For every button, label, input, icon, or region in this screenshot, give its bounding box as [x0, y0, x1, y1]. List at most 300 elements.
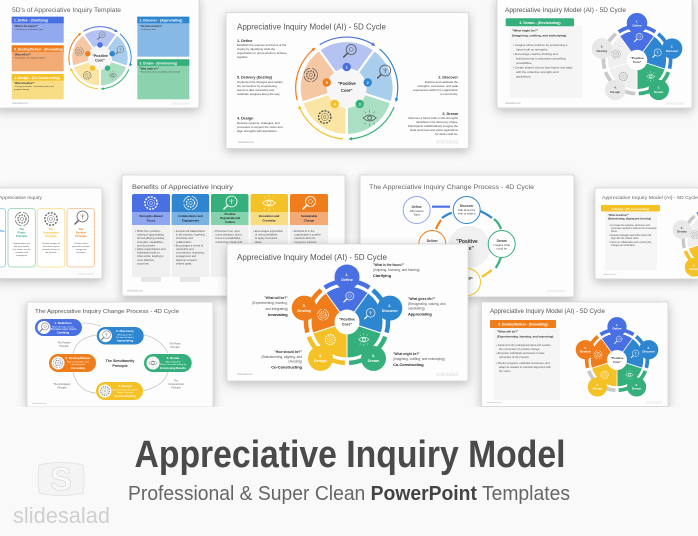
logo: slidesalad: S	[50, 461, 72, 497]
core circle: "Positive	[456, 239, 478, 245]
text: design question and bullets: (Brainstorming, aligning and choosing)	[608, 218, 651, 220]
panel: define	[12, 17, 64, 43]
wheel: full colour 5D cycle: Design	[314, 359, 328, 363]
bullet list: • Imagine what could be by envisioning a	[513, 43, 568, 47]
panel: deliver: 5. Destiny/Deliver - (Innovating)	[14, 47, 63, 51]
slide heading: Appreciative Inquiry Model (AI) - 5D Cycle	[237, 22, 387, 32]
text: dream: ideal outcomes and vision aspirations	[410, 128, 459, 132]
card: anticipatory principle: the present.	[45, 251, 57, 254]
wheel: full colour 5D cycle: "Positive	[339, 318, 355, 322]
bullet list: adapt as needed to maintain alignment with	[499, 365, 551, 369]
principle labels: The Positive	[57, 342, 71, 344]
wheel: design highlighted: Destiny	[677, 230, 687, 234]
callout: clarifying: "What is the focus?"	[373, 263, 405, 267]
column: strength-based focus: Focus	[147, 218, 156, 222]
wheel: dream highlighted: Destiny	[597, 49, 608, 53]
card: positive principle: Positive affect	[74, 242, 88, 245]
principle labels: The Poetic	[169, 342, 182, 346]
card: anticipatory principle: Anticipatory	[43, 230, 59, 234]
slide footer: slidesalad	[78, 272, 94, 276]
callout: co-constructing, left: Co-Constructing	[271, 364, 303, 370]
banner: design: 4. Design - (Co-Constructing)	[611, 207, 649, 211]
wheel: positive core: "Positive	[92, 54, 108, 58]
card: positive principle: generates positive	[72, 245, 91, 248]
slide footer	[238, 140, 458, 146]
text: dream: identified in the discovery phase.	[416, 120, 458, 124]
text: define: together.	[237, 55, 248, 59]
text: destiny question: (Experimenting, learning, and improving)	[497, 334, 553, 338]
node: design: Design	[462, 276, 472, 280]
card: positive principle: Principle	[75, 234, 87, 238]
wheel: full colour 5D cycle: Discover	[382, 309, 398, 313]
wheel: destiny highlighted: 1.	[616, 323, 618, 327]
card: anticipatory principle: Positive images of	[42, 242, 60, 245]
text: dream: 3. Dream	[442, 112, 459, 116]
slide footer: slidesalad.com	[127, 290, 143, 292]
wheel: positive core: 4	[334, 102, 336, 106]
wheel: destiny highlighted: Define	[612, 327, 622, 331]
pill: discovery: What gives life?	[117, 334, 133, 336]
panel: design: "What should be?"	[14, 82, 35, 85]
slide footer: slidesalad.com	[238, 141, 254, 144]
wheel: positive core: Core"	[95, 58, 105, 62]
slide footer	[12, 100, 189, 106]
text: design question and bullets: future.	[611, 230, 618, 233]
text: design question and bullets: "What should be?"	[608, 214, 629, 217]
callout: co-constructing, right: Co-Constructing	[393, 362, 424, 367]
wheel: full colour 5D cycle: Dream	[368, 359, 380, 363]
card: positive principle: The	[79, 227, 84, 231]
wheel: destiny highlighted: 3.	[635, 383, 638, 387]
column: positive organizational culture: Positive	[224, 212, 236, 216]
pill: design	[96, 382, 143, 400]
text: delivery: celebrate progress along the way.	[237, 92, 280, 96]
wheel: positive core: Core"	[341, 88, 352, 93]
slide footer: slidesalad.com	[12, 102, 28, 105]
text: design question and bullets: • Develop strategies and action plans that	[609, 234, 652, 237]
logo: slidesalad: slidesalad	[13, 503, 110, 528]
center label: The Simultaneity	[106, 359, 134, 363]
wheel: design highlighted: 4.	[693, 263, 695, 267]
text panel background	[605, 212, 657, 270]
column: positive organizational culture: Culture	[225, 220, 235, 224]
principle labels: Principle	[171, 386, 181, 390]
column: innovation and creativity: of new possibilities	[255, 233, 278, 237]
callout: appreciating: (Recognizing, valuing, and	[408, 302, 446, 306]
column: strength-based focus: strengths, capabilities,	[137, 240, 164, 244]
banner: destiny	[490, 320, 556, 328]
wheel: dream highlighted: Dream	[654, 90, 664, 94]
text: define: organization or group wants to achieve	[237, 51, 287, 55]
callout: innovating: "What will be?"	[264, 296, 288, 300]
slide: dream stage, top right	[497, 0, 692, 108]
principle labels: Principle	[170, 346, 180, 349]
column: sustainable change: organization's positive	[294, 233, 321, 237]
slide: design stage, right edge	[595, 188, 698, 279]
slide footer: slidesalad	[436, 372, 458, 378]
pill: design: What should be the ideal?	[112, 388, 138, 392]
card: poetic principle: The	[19, 227, 24, 231]
wheel: positive core: 1	[346, 65, 348, 69]
text: destiny question: "What will be?"	[497, 330, 519, 334]
wheel: destiny highlighted: 5.	[584, 346, 587, 350]
slide footer: slidesalad	[645, 400, 662, 404]
bullet list: brainstorming to articulate compelling	[516, 56, 566, 60]
principle labels: The Anticipatory	[53, 383, 71, 386]
column: positive organizational culture: Organizational	[220, 216, 240, 220]
pill: definition: Clarifying	[57, 330, 70, 334]
column: strength-based focus: • Helps organizations and	[135, 247, 166, 251]
wheel: dream highlighted	[592, 13, 682, 100]
wheel: positive core: 5	[326, 81, 328, 85]
wheel: dream highlighted: Define	[633, 23, 642, 27]
node: deliver	[419, 230, 446, 258]
slide heading: The Appreciative Inquiry Change Process - 4D Cycle	[35, 309, 179, 315]
panel: design: • Design principles - Innovative plans and	[14, 85, 55, 88]
text: dream question: "What might be?"	[512, 28, 539, 32]
text: design: 4. Design	[237, 116, 254, 120]
panel: discover: 2. Discover - (Appreciating)	[140, 19, 182, 23]
pill: design: Co-Constructing	[114, 394, 136, 398]
column: strength-based focus: outcomes.	[137, 261, 150, 265]
callout: appreciating: celebrating)	[408, 306, 425, 310]
card: poetic principle: Principle	[16, 234, 28, 238]
bullet list: • Encourage creative thinking and	[513, 52, 558, 56]
text panel background	[494, 328, 560, 400]
column: positive organizational culture: • Promotes trust, open	[214, 229, 241, 233]
text: design: align strengths with aspirations.	[237, 129, 278, 133]
wheel: design highlighted: 5.	[681, 226, 683, 230]
panel: dream	[137, 59, 189, 99]
bullet list: • Monitor progress, celebrate successes, and	[496, 361, 550, 365]
slide heading: Appreciative Inquiry Model (AI) - 5D Cycle	[602, 195, 698, 200]
slide footer	[487, 400, 662, 404]
node: dream: could be	[496, 246, 507, 250]
column: innovation and creativity: Innovation and	[259, 214, 280, 218]
card: anticipatory principle: Principle	[45, 234, 57, 238]
column: sustainable change	[290, 194, 328, 277]
node: define	[403, 196, 430, 224]
panel: define: • Clarifying an intentional topic	[14, 28, 44, 31]
wheel: dream highlighted: Core"	[633, 60, 642, 64]
text: define: 1. Define	[237, 39, 252, 43]
wheel: full colour 5D cycle	[292, 264, 402, 371]
bullet list: ownership of the process.	[499, 355, 530, 359]
column: collaboration and engagement: collaboration.	[176, 240, 192, 244]
pill: dream: Envisioning Results	[160, 366, 186, 370]
wheel: full colour 5D cycle: 1.	[345, 273, 349, 277]
slide: 4D cycle change process	[360, 175, 574, 297]
column: sustainable change: Sustainable	[301, 214, 317, 218]
pill: destiny/deliver: and improvise	[71, 363, 86, 366]
wheel: full colour 5D cycle: 2.	[388, 304, 391, 308]
wheel: design highlighted	[673, 209, 698, 277]
column: strength-based focus: • Shifts from problem-	[135, 229, 161, 233]
pill: definition: affirmative topic choice	[49, 327, 77, 331]
pill: dream: What might be?	[165, 360, 181, 364]
bullet list: • Empower individuals and teams to take	[496, 351, 545, 355]
column: sustainable change: long-term success.	[294, 240, 317, 244]
text: delivery: Implement the changes and sustain	[237, 80, 283, 84]
callout: innovating: Innovating	[268, 312, 288, 317]
text: design: Develop systems, strategies, and	[237, 121, 280, 125]
wheel: positive core: "Positive	[338, 81, 356, 86]
text: define: Establish the purpose and focus of the	[237, 43, 287, 47]
text: dream: Discover a future built on the strengths	[408, 116, 459, 120]
text: discover: strengths, successes, and peak	[418, 84, 459, 88]
column: strength-based focus: and successes.	[137, 243, 156, 247]
slide: destiny stage, bottom right	[482, 302, 668, 406]
wheel: dream highlighted: Discover	[666, 49, 679, 53]
logo: slidesalad	[13, 461, 110, 528]
main title: Appreciative Inquiry Model	[134, 434, 566, 476]
center label: Principle	[112, 364, 128, 368]
bullet list: with the collective strengths and	[516, 70, 559, 74]
callout: co-constructing, right: "What might be?"	[393, 352, 420, 356]
wheel: dream highlighted: Design	[610, 90, 620, 94]
card: positive principle: energy and	[76, 248, 87, 251]
principle labels: Constructionist	[168, 383, 184, 386]
slide footer: slidesalad.com	[237, 373, 253, 376]
wheel: full colour 5D cycle: Destiny	[297, 309, 312, 313]
card: anticipatory principle: the future inspire	[43, 245, 60, 248]
column: positive organizational culture: focus on possibilities,	[216, 236, 241, 240]
callout: innovating: (Experimenting, learning,	[252, 301, 288, 305]
column: innovation and creativity: • Encourages exploration	[253, 229, 283, 233]
bullet list: possibilities.	[516, 61, 532, 65]
wheel: destiny highlighted: Destiny	[580, 350, 591, 354]
slide: 4D process with principles, bottom left	[27, 302, 213, 407]
wheel: destiny highlighted: Dream	[632, 387, 642, 391]
bullet list: the vision.	[499, 369, 511, 373]
column: positive organizational culture	[211, 194, 248, 277]
text: discover: or community.	[440, 92, 458, 96]
pill: design: 4. Design	[118, 384, 132, 388]
column: positive organizational culture: communication, and a	[216, 233, 242, 237]
card: poetic principle: like open books	[14, 246, 30, 248]
slide heading: Benefits of Appreciative Inquiry	[132, 184, 234, 191]
wheel: positive core: 2	[367, 81, 369, 85]
node: discover: best of what is	[458, 212, 476, 216]
card: anticipatory principle: positive actions in	[42, 248, 60, 251]
column: collaboration and engagement: Collaboration and	[178, 214, 203, 218]
wheel: destiny highlighted: Design	[592, 387, 603, 391]
text: define: inquiry by identifying what the	[237, 47, 275, 51]
wheel: dream highlighted: 3.	[658, 86, 660, 90]
node: dream: Imagine what	[493, 243, 510, 247]
column: collaboration and engagement: in the process, fostering	[176, 233, 205, 237]
core circle	[448, 226, 490, 268]
column: sustainable change: • Embeds AI in the	[292, 229, 315, 233]
column: strength-based focus: solving to appreciating	[137, 233, 164, 237]
slide heading: The Appreciative Inquiry Change Process - 4D Cycle	[369, 184, 534, 191]
panel: deliver	[12, 45, 64, 71]
column: innovation and creativity	[250, 194, 288, 277]
text: design question and bullets: align with the shared vision.	[611, 237, 640, 240]
column: collaboration and engagement: Engagement	[182, 218, 199, 222]
card: positive principle: outcomes.	[76, 251, 86, 254]
pill: definition: 1. Definition	[54, 321, 72, 325]
wheel: full colour 5D cycle: Core"	[342, 322, 352, 326]
bullet list: aspirations.	[516, 74, 532, 78]
text: delivery: 5. Delivery (Destiny)	[237, 76, 273, 80]
column: collaboration and engagement: alignment toward	[176, 258, 197, 262]
wheel: destiny highlighted: 4.	[596, 383, 599, 387]
column: strength-based focus: what works, leading to	[137, 254, 164, 258]
node: discover: Talk about the	[458, 208, 476, 212]
text: design question and bullets: • Co-create the systems, structures, and	[609, 224, 651, 227]
banner: destiny: 5. Destiny/Deliver - (Innovating)	[498, 322, 548, 326]
panel: design: program design	[14, 88, 30, 91]
card: poetic principle: Poetic	[18, 230, 26, 234]
text: discover: Explore and celebrate the	[425, 80, 458, 84]
column: collaboration and engagement: shared goals.	[176, 261, 192, 265]
text: delivery: teams to take ownership and	[237, 88, 274, 92]
column: collaboration and engagement: • Encourages a sense of	[174, 243, 203, 247]
node: design	[454, 268, 480, 296]
panel: design: 4. Design - (Co-Constructing)	[14, 76, 60, 80]
callout: clarifying: Clarifying	[373, 273, 392, 278]
column: strength-based focus	[132, 194, 170, 282]
column: sustainable change: Change	[304, 218, 315, 222]
slide footer: slidesalad	[436, 140, 458, 146]
text panel background	[510, 26, 582, 98]
card: poetic principle: rewritten and	[15, 251, 29, 254]
slide footer: slidesalad	[547, 288, 565, 293]
wheel: destiny highlighted: "Positive	[611, 356, 624, 360]
slide footer	[237, 372, 458, 378]
callout: co-constructing, left: "How should be?"	[274, 350, 302, 354]
panel: discover: "The best of what is"	[140, 25, 162, 28]
pill: definition: What is the topic of focus	[52, 326, 74, 328]
pill: dream	[144, 354, 192, 372]
callout: co-constructing, left: (Brainstorming, aligning, and	[261, 355, 302, 359]
slide footer: slidesalad.com	[487, 402, 502, 404]
pill: definition	[35, 319, 82, 336]
text: dream: for what could be.	[435, 132, 458, 136]
wheel: dream highlighted: "Positive	[630, 56, 644, 60]
panel: define: "What is the inquiry?"	[14, 25, 38, 28]
card: poetic principle: Organizations are	[13, 242, 31, 245]
card: poetic principle: that stories can be	[13, 248, 31, 251]
column: collaboration and engagement: • Involves all stakeholders	[174, 229, 206, 233]
column: collaboration and engagement: inclusivity and	[176, 236, 193, 240]
slide heading: Appreciative Inquiry	[0, 195, 43, 201]
node: dream: Dream	[497, 239, 507, 243]
wheel: destiny highlighted: Core"	[613, 360, 622, 364]
subtitle: Professional & Super Clean PowerPoint Templates	[128, 483, 570, 505]
pill: discovery: The best of what is	[116, 336, 135, 339]
slide footer: slidesalad.com	[505, 102, 521, 105]
pill: discovery: Appreciating	[117, 338, 134, 342]
node: define: Affirmative	[410, 209, 424, 213]
panel: deliver: "What will be?"	[14, 54, 31, 56]
card: anticipatory principle: The	[49, 227, 54, 231]
panel: discover: • Looking at data	[140, 28, 157, 31]
bullet list: • Create shared visions that inspire and align	[513, 66, 573, 70]
text: dream: Participants collaboratively imagine the	[408, 124, 458, 128]
pill: destiny/deliver: Innovating	[71, 366, 85, 370]
slide: benefits	[122, 175, 345, 296]
text: design question and bullets: changes are actionable.	[611, 244, 636, 247]
panel: dream: "What might be?"	[140, 68, 159, 70]
text: discover: 2. Discover	[438, 76, 459, 80]
principle labels: Principle	[57, 386, 67, 390]
node: discover	[453, 196, 480, 224]
column: collaboration and engagement	[172, 194, 209, 282]
principle labels	[53, 342, 184, 390]
node: discover: Discover	[460, 204, 474, 208]
pill: design: What is the ideal	[117, 391, 134, 394]
panel: deliver: • Innovation and implementation	[14, 56, 46, 60]
pill: dream: 3. Dream	[167, 356, 180, 360]
slide heading: 5D's of Appreciative Inquiry Template	[12, 7, 121, 14]
bullet list: the momentum of positive change.	[499, 347, 540, 351]
text: dream question: (Imagining, crafting, and embodying)	[512, 34, 566, 38]
banner: dream	[506, 18, 574, 26]
slide footer: slidesalad	[171, 100, 189, 106]
callout: appreciating: "What gives life?"	[408, 297, 436, 301]
slide heading: Appreciative Inquiry Model (AI) - 5D Cycle	[490, 309, 606, 315]
slide heading: Appreciative Inquiry Model (AI) - 5D Cycle	[237, 253, 387, 262]
callout: co-constructing, right: (Imagining, crafting, and embodying)	[393, 357, 445, 361]
text: design question and bullets: processes needed to achieve the envisioned	[611, 227, 657, 230]
slide footer: slidesalad	[665, 100, 683, 106]
card: poetic principle	[8, 208, 35, 267]
card: poetic principle: reimagined.	[16, 254, 28, 257]
pill: destiny/deliver: How to empower, learn	[67, 360, 90, 364]
bullet list: • Implement the redesigned plans and sustain	[496, 343, 551, 347]
wheel: positive core: 3	[359, 102, 361, 106]
column: innovation and creativity: Creativity	[262, 218, 276, 222]
text: design: processes to support the vision and	[237, 125, 283, 129]
wheel: full colour 5D cycle: Define	[341, 278, 353, 282]
wheel: dream highlighted: 1.	[636, 19, 638, 23]
connecting arcs	[73, 323, 168, 393]
connectors	[432, 207, 501, 277]
column: innovation and creativity: to apply innovative	[255, 236, 278, 240]
column: collaboration and engagement: commitment, improving	[176, 251, 204, 255]
node: dream	[488, 230, 515, 258]
core circle: Core"	[460, 246, 475, 252]
wheel: full colour 5D cycle: 5.	[303, 304, 306, 308]
column: collaboration and engagement: engagement and	[176, 254, 197, 258]
wheel: destiny highlighted: Discover	[642, 350, 656, 354]
column: sustainable change: transformation for	[294, 236, 316, 240]
wheel: positive core	[69, 27, 131, 89]
principle labels: Principle	[59, 345, 69, 348]
slide: principles, left edge	[0, 188, 102, 278]
card: anticipatory principle	[37, 208, 65, 267]
pill: destiny/deliver: 5. Destiny/Deliver	[65, 356, 91, 360]
wheel: destiny highlighted: 2.	[647, 346, 650, 350]
bullet list: future built on strengths.	[516, 48, 548, 52]
card: positive principle: Positive	[76, 230, 87, 234]
pill: discovery	[97, 327, 144, 344]
wheel: positive core	[296, 37, 398, 139]
column: innovation and creativity: ideas.	[255, 240, 262, 244]
panel: define: 1. Define - (Clarifying)	[14, 19, 48, 23]
slide: 5D's template, top left	[0, 0, 199, 108]
wheel: dream highlighted: 5.	[601, 45, 603, 49]
text: design question and bullets: • Focus on collaboration and ensuring the	[609, 241, 652, 244]
wheel: dream highlighted: 2.	[671, 45, 674, 49]
slide footer: slidesalad.com	[603, 274, 617, 276]
pill: destiny/deliver	[49, 354, 96, 372]
callout: clarifying: (Inquiring, focusing, and framing)	[373, 268, 420, 272]
callout: co-constructing, left: choosing)	[288, 360, 302, 364]
column: positive organizational culture: enhancing morale and	[216, 240, 243, 244]
